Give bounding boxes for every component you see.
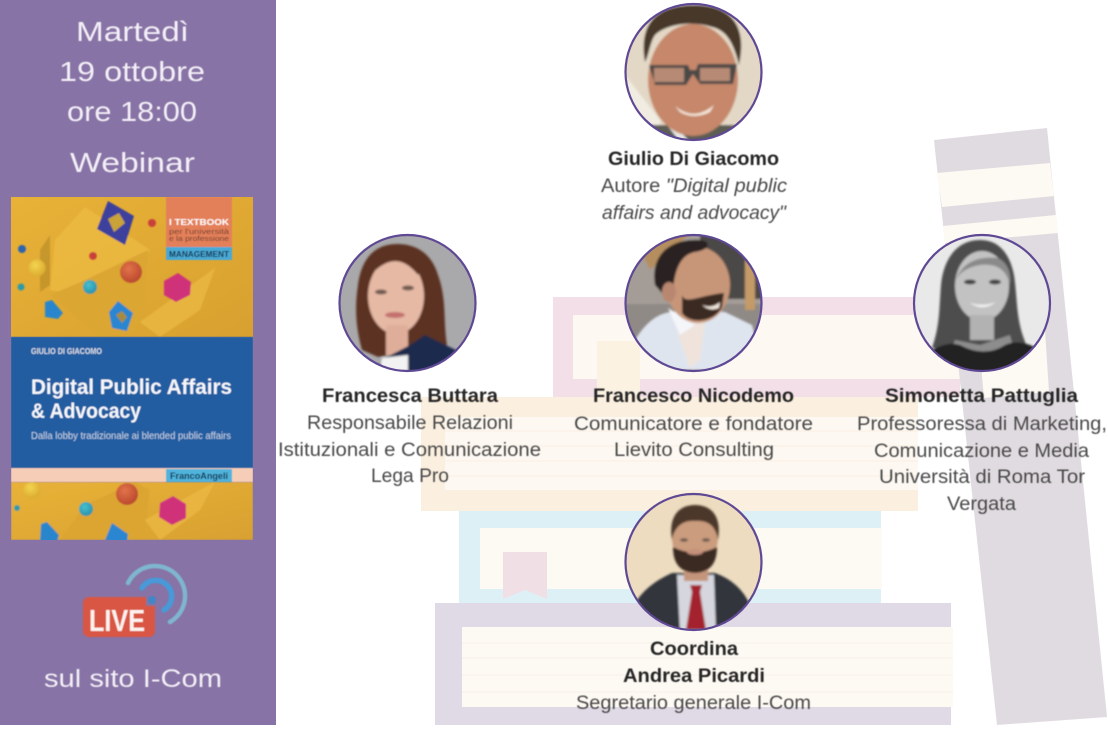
cover title block: Dalla lobby tradizionale ai blended public affairs: [31, 430, 231, 442]
text: sul sito I-Com: sul sito I-Com: [44, 665, 222, 693]
caption: Simonetta Pattuglia: Professoressa di Marketing,: [857, 414, 1107, 435]
portrait: Simonetta Pattuglia: [914, 234, 1050, 375]
cover title block: GIULIO DI GIACOMO: [31, 347, 102, 356]
date and time text: [59, 16, 205, 178]
caption: Francesco Nicodemo: Lievito Consulting: [614, 440, 774, 461]
portrait: Giulio Di Giacomo: [625, 3, 762, 143]
bookmark: pink: [503, 552, 547, 599]
caption: Francesca Buttara: Responsabile Relazioni: [307, 413, 513, 434]
date and time text: 19 ottobre: [59, 56, 205, 87]
caption: Giulio Di Giacomo: Giulio Di Giacomo: [608, 149, 779, 170]
date and time text: Martedì: [76, 16, 189, 47]
cover title block: [11, 337, 253, 468]
caption: Francesco Nicodemo: [574, 386, 813, 461]
cover label boxes: I TEXTBOOK: [169, 217, 230, 227]
background books illustration: [421, 128, 1107, 725]
publisher strip: FrancoAngeli: [170, 471, 228, 482]
caption: Simonetta Pattuglia: Comunicazione e Media: [874, 441, 1089, 462]
caption: Francesco Nicodemo: Comunicatore e fondatore: [574, 414, 813, 435]
caption: Francesca Buttara: Istituzionali e Comunicazione: [278, 440, 541, 461]
date and time text: ore 18:00: [67, 96, 197, 127]
book: orange: [421, 397, 918, 511]
icon: LIVE broadcast: [83, 566, 185, 638]
book: pink top: [553, 297, 960, 397]
caption: Simonetta Pattuglia: Università di Roma Tor: [879, 467, 1086, 488]
caption: Coordina Andrea Picardi: Segretario generale I-Com: [576, 693, 811, 714]
caption: Francesca Buttara: Francesca Buttara: [322, 386, 498, 407]
publisher strip: [11, 468, 253, 482]
book cover: [11, 197, 253, 542]
left sidebar panel: [0, 0, 276, 725]
caption: Simonetta Pattuglia: [857, 386, 1107, 515]
caption: Coordina Andrea Picardi: Coordina: [650, 639, 738, 660]
cover title block: Digital Public Affairs: [31, 376, 232, 399]
cover label boxes: per l'università: [169, 229, 229, 236]
date and time text: Webinar: [70, 147, 195, 178]
icon: LIVE broadcast: LIVE: [89, 603, 145, 638]
cover label boxes: e la professione: [169, 236, 229, 243]
caption: Coordina Andrea Picardi: Andrea Picardi: [623, 666, 765, 687]
caption: Francesca Buttara: Lega Pro: [371, 466, 449, 487]
portrait: Francesco Nicodemo: [625, 234, 765, 372]
portrait: Francesca Buttara: [339, 234, 476, 375]
cover label boxes: MANAGEMENT: [169, 250, 229, 259]
caption: Simonetta Pattuglia: Simonetta Pattuglia: [885, 386, 1078, 407]
caption: Giulio Di Giacomo: affairs and advocacy": [602, 203, 787, 224]
portrait: Andrea Picardi: [625, 494, 762, 632]
cover artwork bottom: [11, 482, 253, 542]
book: tilted leaning: [934, 128, 1107, 725]
caption: Simonetta Pattuglia: Vergata: [947, 494, 1016, 515]
caption: Giulio Di Giacomo: Autore "Digital public: [601, 176, 788, 197]
cover artwork top: [18, 201, 215, 337]
caption: Giulio Di Giacomo: [601, 149, 788, 224]
book: blue: [459, 511, 882, 607]
caption: Francesca Buttara: [278, 386, 541, 487]
caption: Francesco Nicodemo: Francesco Nicodemo: [593, 386, 794, 407]
book: purple bottom: [435, 603, 953, 725]
cover title block: & Advocacy: [31, 400, 141, 423]
caption: Coordina Andrea Picardi: [576, 639, 811, 714]
cover label boxes: [166, 197, 232, 260]
